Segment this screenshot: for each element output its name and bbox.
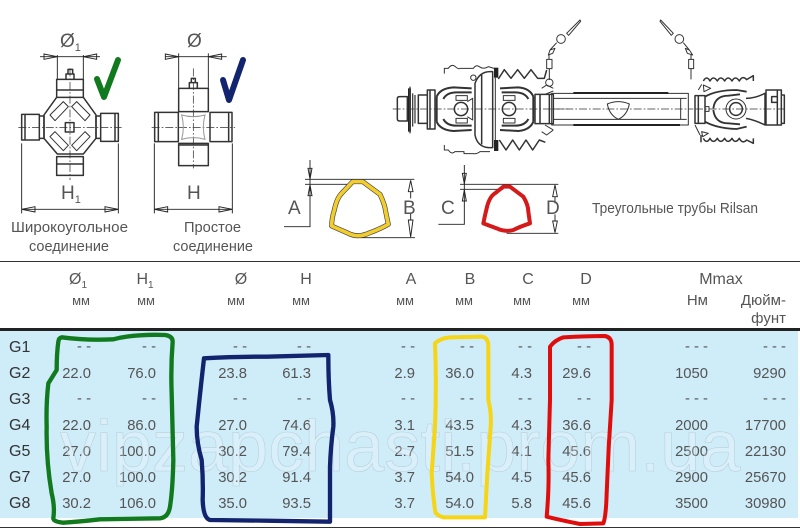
row G4: 2000 bbox=[675, 418, 708, 434]
row G3: - - bbox=[577, 391, 591, 407]
table header: Дюйм- bbox=[741, 292, 786, 309]
table bottom rule bbox=[0, 527, 800, 528]
row G2: 36.0 bbox=[445, 366, 474, 382]
table header: C bbox=[522, 271, 534, 288]
row G3: - - bbox=[77, 391, 91, 407]
hand-drawn blue outline: simple joint columns bbox=[197, 355, 333, 522]
row G2: 22.0 bbox=[62, 366, 91, 382]
table header: Нм bbox=[687, 292, 708, 309]
hand-drawn yellow outline: column B bbox=[432, 337, 491, 517]
row G5 bbox=[62, 444, 786, 460]
row G4: 43.5 bbox=[445, 418, 474, 434]
row labels bbox=[9, 339, 30, 512]
row labels: G2 bbox=[9, 365, 30, 382]
row G8: 3500 bbox=[675, 496, 708, 512]
row G1 bbox=[77, 339, 786, 355]
row G2: 1050 bbox=[675, 366, 708, 382]
row G2: 23.8 bbox=[218, 366, 247, 382]
heading: height label: H bbox=[187, 183, 201, 204]
table header: H bbox=[136, 271, 148, 288]
row G4: 27.0 bbox=[218, 418, 247, 434]
row G3: - - bbox=[297, 391, 311, 407]
row G7: 27.0 bbox=[62, 470, 91, 486]
text: simple joint caption bbox=[173, 219, 253, 255]
heading: diameter one label: 1 bbox=[75, 42, 81, 54]
row G1: - - bbox=[142, 339, 156, 355]
row G1: - - bbox=[518, 339, 532, 355]
row G7: 4.5 bbox=[511, 470, 532, 486]
panel: yellow triangular tube profile bbox=[284, 160, 415, 238]
row G5: 45.6 bbox=[562, 444, 591, 460]
row G7: 45.6 bbox=[562, 470, 591, 486]
table header rule bbox=[0, 328, 800, 331]
row labels: G4 bbox=[9, 417, 30, 434]
row G3: - - bbox=[233, 391, 247, 407]
row G5: 4.1 bbox=[511, 444, 532, 460]
row G4: 22.0 bbox=[62, 418, 91, 434]
row G5: 22130 bbox=[745, 444, 786, 460]
row G1: - - bbox=[297, 339, 311, 355]
panel: PTO shaft drawing bbox=[393, 20, 787, 154]
row G2: 61.3 bbox=[282, 366, 311, 382]
table header: D bbox=[580, 271, 592, 288]
row G2 bbox=[62, 366, 786, 382]
shaft safety chains bbox=[546, 20, 694, 86]
row G3 bbox=[77, 391, 786, 407]
row G2: 4.3 bbox=[511, 366, 532, 382]
row labels: G5 bbox=[9, 443, 30, 460]
row G4: 3.1 bbox=[394, 418, 415, 434]
panel: simple joint diagram bbox=[152, 53, 235, 213]
row G8: 5.8 bbox=[511, 496, 532, 512]
text: simple joint caption: Простое bbox=[184, 219, 241, 236]
row G1: - - bbox=[577, 339, 591, 355]
row G1: - - bbox=[233, 339, 247, 355]
row G7: 91.4 bbox=[282, 470, 311, 486]
text: simple joint caption: соединение bbox=[173, 238, 253, 255]
row G5: 100.0 bbox=[119, 444, 156, 460]
table header: Mmax bbox=[699, 271, 743, 288]
row G2: 76.0 bbox=[127, 366, 156, 382]
heading: height one label: H bbox=[61, 183, 75, 204]
row G7: 100.0 bbox=[119, 470, 156, 486]
row G5: 79.4 bbox=[282, 444, 311, 460]
row G3: - - - bbox=[763, 391, 786, 407]
row G8: 35.0 bbox=[218, 496, 247, 512]
row labels: G8 bbox=[9, 495, 30, 512]
row G5: 27.0 bbox=[62, 444, 91, 460]
heading: diameter label: Ø bbox=[187, 31, 202, 52]
row G8: 54.0 bbox=[445, 496, 474, 512]
row labels: G1 bbox=[9, 339, 30, 356]
row G3: - - bbox=[518, 391, 532, 407]
shaft right end: yoke and guard bbox=[695, 76, 787, 143]
row G8: 3.7 bbox=[394, 496, 415, 512]
text: dimension B: B bbox=[403, 198, 416, 219]
row G3: - - bbox=[401, 391, 415, 407]
panel: wide-angle joint diagram bbox=[18, 54, 122, 213]
watermark: vipzapchasti.prom.ua bbox=[60, 407, 741, 487]
table header: мм bbox=[396, 293, 414, 308]
row G2: 2.9 bbox=[394, 366, 415, 382]
table header: H bbox=[300, 271, 312, 288]
row G1: - - - bbox=[685, 339, 708, 355]
row G1: - - - bbox=[763, 339, 786, 355]
text: wide-angle joint caption: соединение bbox=[29, 238, 109, 255]
row G4: 74.6 bbox=[282, 418, 311, 434]
row G3: - - bbox=[460, 391, 474, 407]
row G8: 30.2 bbox=[62, 496, 91, 512]
row G2: 9290 bbox=[753, 366, 786, 382]
row G5: 51.5 bbox=[445, 444, 474, 460]
row G1: - - bbox=[77, 339, 91, 355]
table header: фунт bbox=[751, 310, 786, 327]
row G8: 45.6 bbox=[562, 496, 591, 512]
text: wide-angle joint caption: Широкоугольное bbox=[11, 219, 128, 236]
row G4: 17700 bbox=[745, 418, 786, 434]
text: dimension D: D bbox=[546, 198, 560, 219]
table header: мм bbox=[572, 293, 590, 308]
icon: green check mark bbox=[97, 60, 118, 97]
row G5: 30.2 bbox=[218, 444, 247, 460]
row G4: 4.3 bbox=[511, 418, 532, 434]
text: dimension A: A bbox=[288, 198, 301, 219]
table header: мм bbox=[137, 293, 155, 308]
table header: 1 bbox=[148, 280, 154, 291]
table header bbox=[69, 271, 786, 327]
row labels: G3 bbox=[9, 391, 30, 408]
heading: height one label: 1 bbox=[75, 194, 81, 206]
table header: 1 bbox=[81, 280, 87, 291]
row G7: 3.7 bbox=[394, 470, 415, 486]
panel: red triangular tube profile bbox=[438, 165, 558, 233]
row G7: 30.2 bbox=[218, 470, 247, 486]
row G8 bbox=[62, 496, 786, 512]
table header: мм bbox=[292, 293, 310, 308]
row G8: 93.5 bbox=[282, 496, 311, 512]
icon: blue check mark bbox=[223, 60, 243, 100]
row G4 bbox=[62, 418, 786, 434]
row G7 bbox=[62, 470, 786, 486]
shaft left end: stub, yokes, clutch bbox=[393, 65, 570, 154]
row G1: - - bbox=[401, 339, 415, 355]
table header: мм bbox=[72, 293, 90, 308]
table header: мм bbox=[455, 293, 473, 308]
hand-drawn green outline: wide-angle columns bbox=[47, 335, 173, 523]
row G4: 36.6 bbox=[562, 418, 591, 434]
table body background bbox=[0, 330, 798, 518]
table header: B bbox=[465, 271, 475, 288]
table header: Ø bbox=[235, 271, 247, 288]
row labels: G7 bbox=[9, 469, 30, 486]
row G7: 54.0 bbox=[445, 470, 474, 486]
table top rule bbox=[0, 261, 800, 262]
row G8: 30980 bbox=[745, 496, 786, 512]
row G2: 29.6 bbox=[562, 366, 591, 382]
table header: мм bbox=[227, 293, 245, 308]
table header: A bbox=[406, 271, 417, 288]
text: dimension C: C bbox=[441, 198, 455, 219]
heading: diameter one label: Ø bbox=[60, 31, 75, 52]
row G7: 2900 bbox=[675, 470, 708, 486]
text: wide-angle joint caption bbox=[11, 219, 128, 255]
row G4: 86.0 bbox=[127, 418, 156, 434]
row G5: 2500 bbox=[675, 444, 708, 460]
text: Rilsan tubes caption: Треугольные трубы Rilsan bbox=[592, 200, 758, 217]
table rows bbox=[9, 339, 786, 512]
table header: Ø bbox=[69, 271, 81, 288]
row G3: - - - bbox=[685, 391, 708, 407]
row G1: - - bbox=[460, 339, 474, 355]
row G8: 106.0 bbox=[119, 496, 156, 512]
row G3: - - bbox=[142, 391, 156, 407]
hand-drawn red outline: column D bbox=[547, 336, 612, 524]
row G5: 2.7 bbox=[394, 444, 415, 460]
shaft tube bbox=[552, 93, 693, 125]
table header: мм bbox=[513, 293, 531, 308]
row G7: 25670 bbox=[745, 470, 786, 486]
